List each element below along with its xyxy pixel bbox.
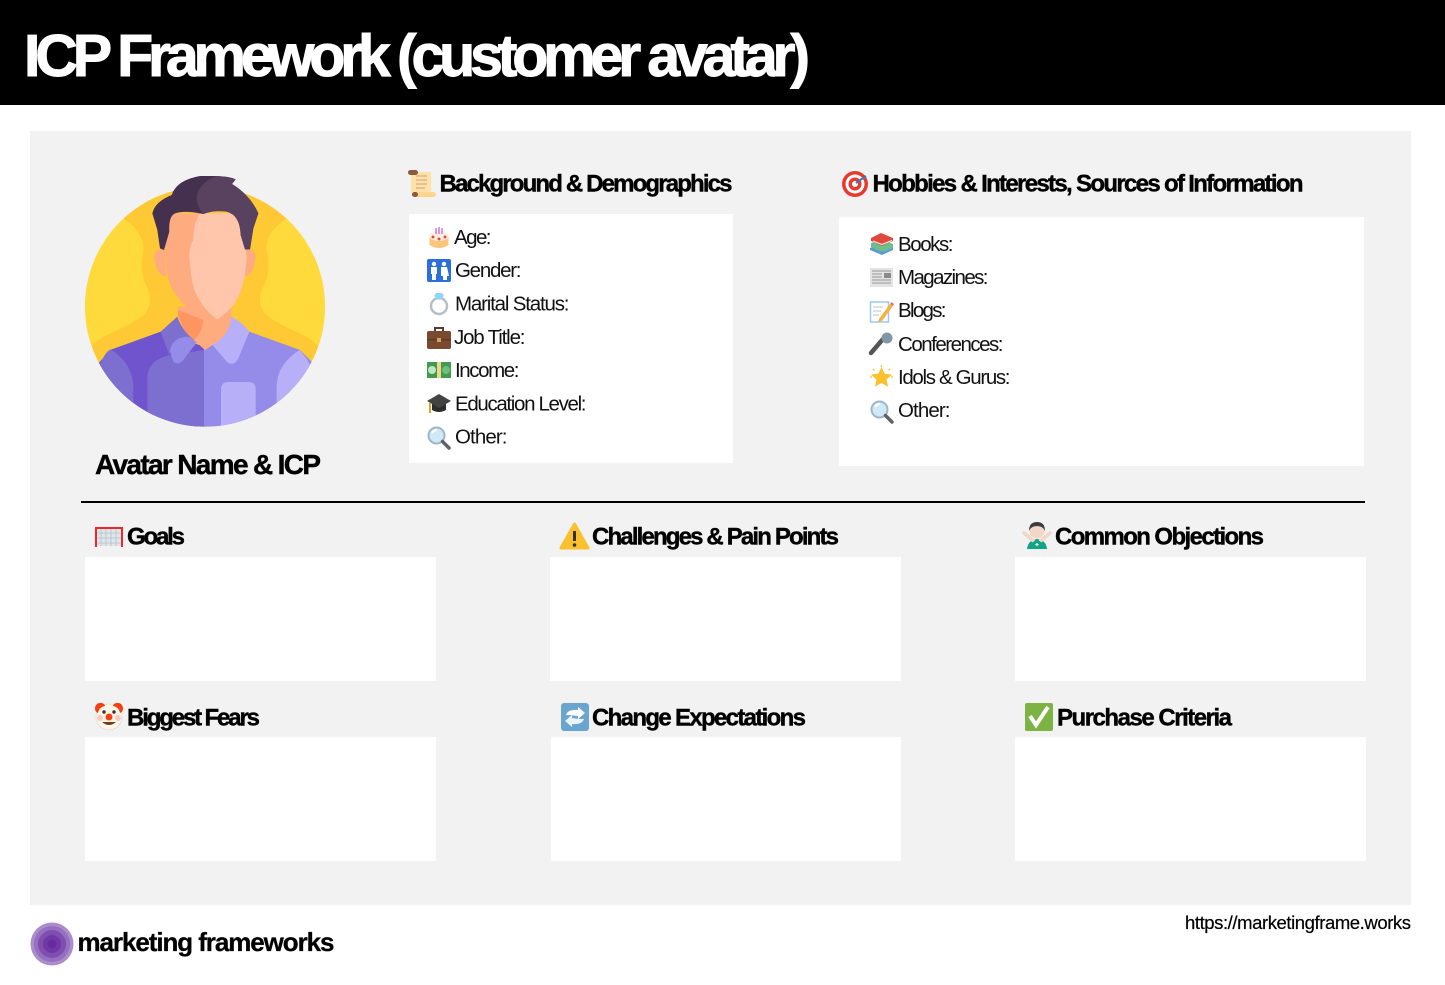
title: ICP Framework (customer avatar) — [24, 23, 810, 89]
icon: birthday cake — [430, 227, 448, 248]
header band — [0, 0, 1445, 105]
icon: magnifier — [872, 402, 892, 422]
panel: goals — [85, 524, 436, 681]
label: other: Other: — [898, 399, 950, 422]
icon: clown face — [95, 703, 123, 730]
icon: magnifier — [428, 428, 449, 448]
label: blogs: Blogs: — [898, 299, 946, 322]
label: other: Other: — [455, 426, 508, 448]
footer brand: marketing frameworks — [78, 927, 334, 957]
icon: graduation cap — [427, 394, 451, 413]
icon: goal net — [96, 528, 122, 547]
panel: biggest fears — [85, 703, 436, 861]
panel: biggest fears: Biggest Fears — [127, 704, 260, 732]
icon: restroom — [427, 259, 451, 282]
icon: target — [842, 171, 868, 197]
label: books: Books: — [898, 233, 954, 256]
main panel background — [30, 131, 1411, 905]
label: job title: Job Title: — [454, 326, 526, 349]
panel: challenges and pain points: Challenges & Pain Points — [592, 524, 839, 550]
heading: background and demographics: Background & Demographics — [440, 170, 732, 198]
icon: arrows button — [561, 703, 589, 731]
icon: glowing star — [870, 365, 893, 387]
icon: microphone — [871, 332, 892, 353]
icon: check mark — [1025, 703, 1053, 731]
icon: person gesturing no — [1024, 522, 1050, 549]
icon: newspaper — [870, 268, 893, 287]
panel: challenges and pain points — [550, 524, 901, 681]
icon: ring — [431, 293, 447, 314]
heading: hobbies and interests: Hobbies & Interests, Sources of Information — [872, 170, 1304, 198]
icon: warning — [561, 524, 588, 548]
panel: change expectations — [551, 703, 901, 861]
panel: common objections — [1015, 522, 1366, 681]
label: idols and gurus: Idols & Gurus: — [898, 366, 1010, 389]
panel: change expectations: Change Expectations — [592, 704, 806, 732]
label: conferences: Conferences: — [898, 333, 1004, 356]
panel: purchase criteria: Purchase Criteria — [1057, 704, 1233, 732]
panel: purchase criteria — [1015, 703, 1366, 861]
label: marital status: Marital Status: — [455, 292, 570, 316]
label: education level: Education Level: — [455, 392, 586, 416]
website url: https://marketingframe.works — [1185, 912, 1411, 933]
icon: memo — [870, 302, 894, 322]
icon: briefcase — [427, 328, 451, 349]
label: income: Income: — [455, 359, 520, 382]
avatar illustration — [84, 176, 325, 427]
avatar name heading: Avatar Name & ICP — [95, 449, 321, 480]
label: gender: Gender: — [455, 259, 522, 282]
panel: demographics list — [409, 214, 733, 463]
icon: banknotes — [427, 362, 451, 378]
panel: goals: Goals — [127, 524, 185, 550]
panel: sources list — [839, 217, 1364, 466]
label: age: Age: — [454, 226, 492, 249]
footer brand — [30, 922, 334, 966]
icon: scroll — [408, 170, 436, 197]
panel: common objections: Common Objections — [1055, 524, 1264, 550]
label: magazines: Magazines: — [898, 266, 988, 289]
icon: books — [870, 233, 893, 255]
icon: brand logo — [30, 922, 74, 966]
